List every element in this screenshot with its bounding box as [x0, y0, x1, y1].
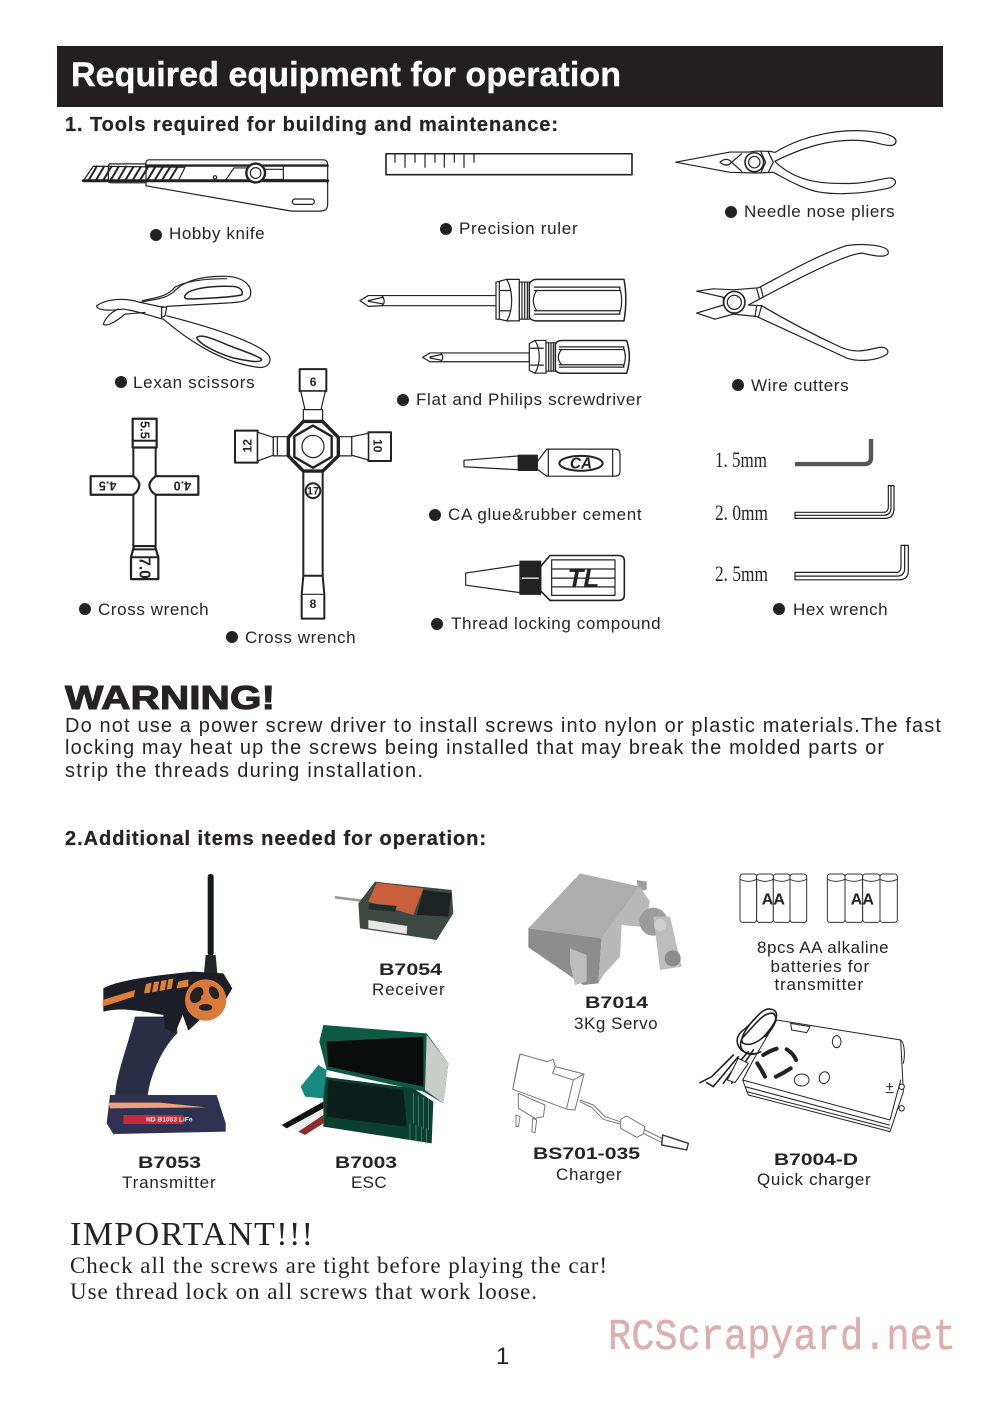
hobby knife label: Hobby knife	[169, 224, 265, 243]
cross wrench label 2: Cross wrench	[245, 628, 356, 647]
icon: quick charger	[700, 1009, 904, 1132]
icon: large cross wrench	[235, 369, 391, 619]
ESC label: B7003	[335, 1153, 397, 1172]
icon: hobby knife	[83, 160, 328, 211]
icon: precision ruler	[386, 154, 632, 175]
icon: hex wrench set: 1. 5mm	[715, 447, 767, 472]
thread lock label: Thread locking compound	[451, 614, 661, 633]
receiver label	[372, 960, 445, 999]
wire cutters label: Wire cutters	[751, 376, 849, 395]
icon: AA batteries: AA	[851, 892, 874, 909]
receiver label: Receiver	[372, 980, 445, 999]
quick charger label: Quick charger	[757, 1170, 871, 1189]
transmitter label	[122, 1153, 216, 1192]
important heading: IMPORTANT!!!	[70, 1216, 313, 1253]
icon: AA batteries	[740, 874, 897, 922]
warning text	[65, 715, 941, 782]
important text: Check all the screws are tight before playing the car!	[70, 1253, 607, 1278]
quick charger label	[757, 1150, 871, 1189]
charger label	[533, 1144, 640, 1184]
icon: small cross wrench: 7.0	[136, 557, 153, 579]
cross wrench label: Cross wrench	[98, 600, 209, 619]
icon: CA glue bottle	[464, 449, 620, 476]
icon: large cross wrench: 12	[241, 439, 255, 453]
title banner: Required equipment for operation	[71, 56, 621, 94]
icon: small cross wrench: 4.0	[174, 479, 191, 494]
title banner	[57, 46, 943, 107]
batteries label: batteries for	[770, 957, 870, 976]
icon: thread lock bottle	[466, 556, 624, 600]
needle nose pliers label: Needle nose pliers	[744, 202, 895, 221]
batteries label: transmitter	[774, 975, 864, 994]
receiver label: B7054	[379, 960, 443, 979]
icon: hex wrench set: 2. 0mm	[715, 500, 768, 525]
icon: wall charger	[513, 1054, 688, 1150]
photo: transmitter	[103, 874, 232, 1134]
heading: additional items: 2.Additional items needed for operation:	[65, 828, 486, 850]
servo label: B7014	[585, 993, 649, 1012]
charger label: BS701-035	[533, 1144, 640, 1163]
ESC label: ESC	[351, 1173, 387, 1192]
page number: 1	[496, 1343, 509, 1370]
transmitter label: Transmitter	[122, 1173, 216, 1192]
batteries label	[757, 938, 889, 994]
screwdriver label: Flat and Philips screwdriver	[416, 390, 642, 409]
icon: small cross wrench: 5.5	[137, 421, 152, 439]
icon: flat screwdriver	[423, 340, 629, 373]
ESC label	[335, 1153, 397, 1192]
icon: wire cutters	[697, 245, 888, 360]
important text	[70, 1253, 607, 1304]
photo: transmitter: ND B1053 LiFe	[146, 1117, 193, 1124]
watermark: RCScrapyard.net	[608, 1313, 956, 1363]
icon: small cross wrench: 4.5	[99, 479, 116, 494]
warning text: Do not use a power screw driver to install screws into nylon or plastic materials.The fast	[65, 715, 941, 737]
icon: AA batteries: AA	[762, 892, 785, 909]
batteries label: 8pcs AA alkaline	[757, 938, 889, 957]
icon: needle nose pliers	[676, 131, 896, 194]
precision ruler label: Precision ruler	[459, 219, 578, 238]
icon: CA glue bottle: CA	[570, 456, 592, 473]
warning text: strip the threads during installation.	[65, 760, 423, 782]
icon: servo	[528, 873, 682, 985]
lexan scissors label: Lexan scissors	[133, 373, 255, 392]
icon: hex wrench set	[715, 439, 908, 586]
photo: ESC	[282, 1025, 448, 1143]
hex wrench label: Hex wrench	[793, 600, 888, 619]
servo label: 3Kg Servo	[574, 1014, 658, 1033]
icon: hex wrench set: 2. 5mm	[715, 561, 768, 586]
icon: large cross wrench: 9	[309, 375, 316, 389]
heading: tools required: 1. Tools required for building and maintenance:	[65, 114, 558, 136]
charger label: Charger	[556, 1165, 622, 1184]
icon: small cross wrench	[91, 419, 198, 579]
icon: large cross wrench: 8	[310, 597, 317, 611]
warning text: locking may heat up the screws being installed that may break the molded parts or	[65, 737, 884, 759]
icon: lexan scissors	[97, 276, 270, 367]
important text: Use thread lock on all screws that work loose.	[70, 1279, 537, 1304]
photo: receiver	[335, 882, 453, 940]
CA glue label: CA glue&rubber cement	[448, 505, 642, 524]
icon: large cross wrench: 17	[307, 486, 319, 498]
icon: thread lock bottle: TL	[567, 563, 599, 593]
warning heading: WARNING!	[65, 679, 275, 716]
servo label	[574, 993, 658, 1033]
quick charger label: B7004-D	[774, 1150, 858, 1169]
icon: large cross wrench: 10	[371, 439, 385, 453]
transmitter label: B7053	[138, 1153, 201, 1172]
icon: philips screwdriver	[360, 279, 626, 321]
